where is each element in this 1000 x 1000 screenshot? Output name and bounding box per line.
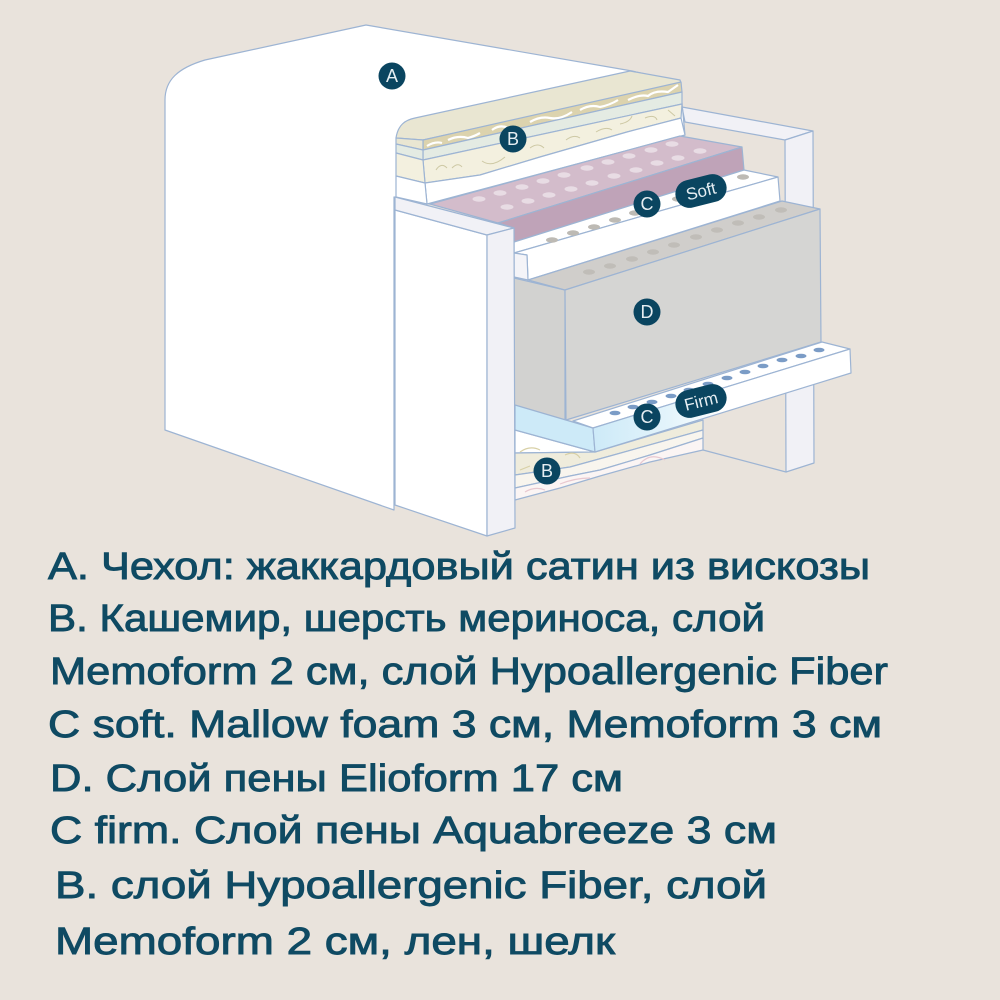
badge D: D (640, 302, 654, 322)
pill Firm (672, 381, 730, 421)
legend text: А. Чехол: жаккардовый сатин из вискозы (48, 546, 870, 588)
front left panel (395, 197, 515, 536)
foam block D (514, 201, 821, 420)
soft layer C (514, 170, 780, 280)
legend text: C soft. Mallow foam 3 см, Memoform 3 см (48, 704, 882, 746)
legend text: D. Слой пены Elioform 17 см (50, 758, 623, 800)
legend text: Memoform 2 см, лен, шелк (55, 921, 615, 963)
legend text: B. Кашемир, шерсть мериноса, слой (48, 598, 765, 640)
legend text: Memoform 2 см, слой Hypoallergenic Fiber (50, 651, 888, 693)
bottom layers B (515, 420, 703, 500)
pill Soft: Soft (684, 179, 718, 204)
legend text: B. слой Hypoallergenic Fiber, слой (55, 865, 767, 907)
badge A (378, 62, 406, 90)
firm layer C (515, 342, 851, 452)
badge B bottom: B (541, 461, 553, 481)
top layers B (396, 71, 685, 204)
badge C firm: C (640, 407, 654, 427)
badge C soft: C (640, 194, 654, 214)
badge B top (500, 126, 526, 152)
back right frame (682, 107, 814, 472)
legend text: C firm. Слой пены Aquabreeze 3 см (50, 810, 777, 852)
mattress illustration (165, 25, 851, 536)
badge C firm (634, 404, 660, 430)
badge D (634, 298, 660, 326)
pill Soft (672, 171, 730, 211)
badge A: A (386, 66, 398, 86)
badge B top: B (507, 129, 519, 149)
badge B bottom (534, 458, 560, 484)
legend text (48, 546, 888, 963)
pill Firm: Firm (682, 388, 720, 415)
purple layer (430, 136, 744, 242)
outer cover A (165, 25, 685, 510)
badge C soft (634, 190, 660, 218)
